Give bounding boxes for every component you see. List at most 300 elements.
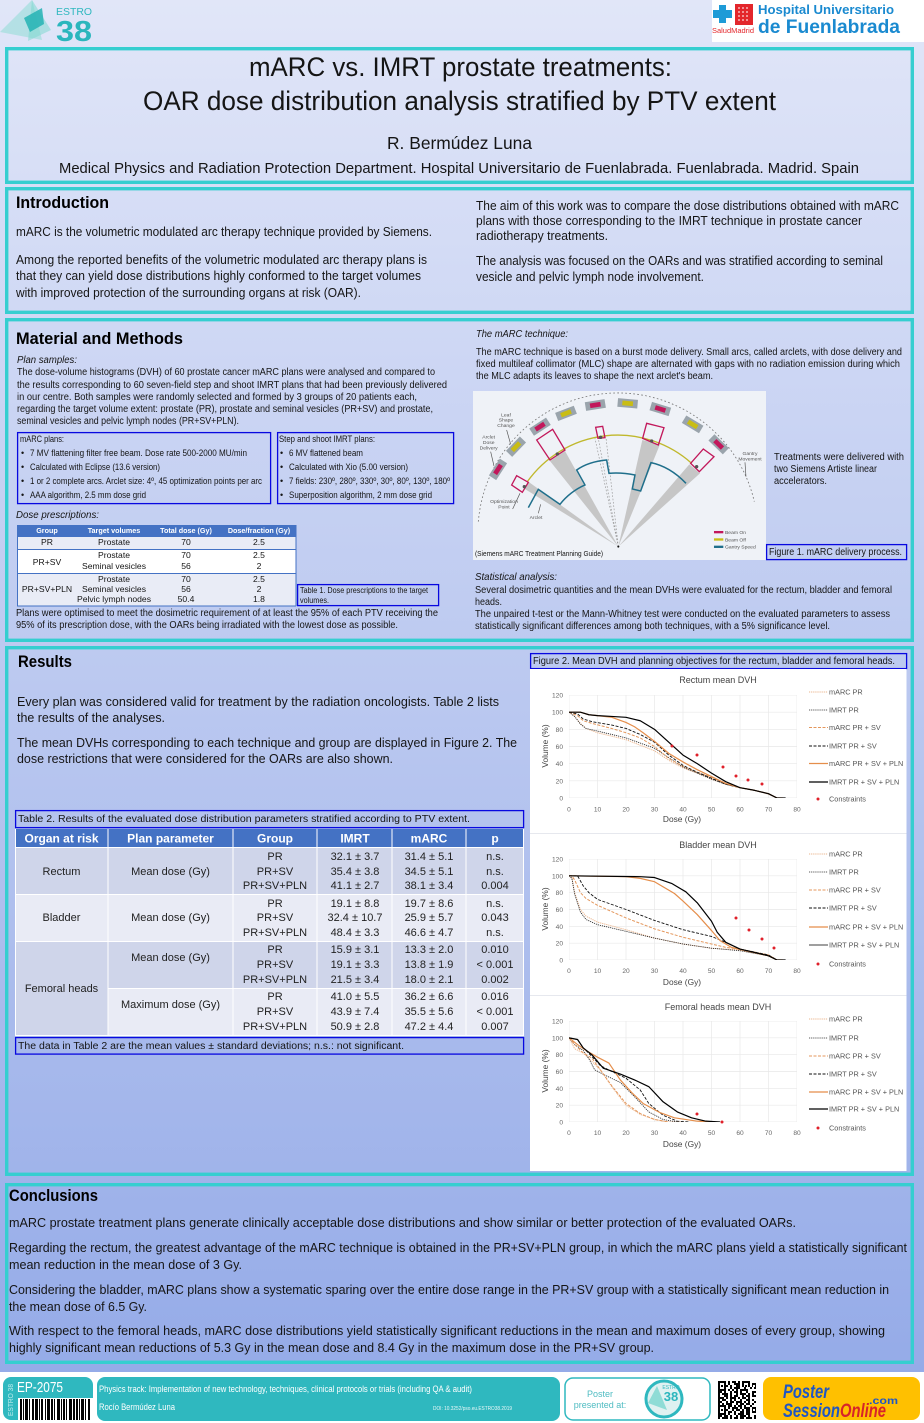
- table 2 row: femoral heads mean dose: 0.002: [481, 974, 509, 986]
- figure 2: DVH charts: [530, 669, 906, 1171]
- table 2: dose distribution results: [15, 829, 524, 1036]
- box: mARC plans: •: [21, 462, 24, 472]
- text: plan samples: [17, 355, 447, 427]
- logo: Hospital Universitario de Fuenlabrada: de Fuenlabrada: [758, 16, 900, 38]
- chart: rectum mean DVH: Dose (Gy): [663, 814, 701, 824]
- text: introduction right column: radiotherapy treatments.: [476, 228, 608, 243]
- text: the mARC technique: The mARC technique:: [476, 329, 568, 340]
- chart: bladder mean DVH: 30: [651, 968, 658, 975]
- title: OAR dose distribution analysis stratified by PTV extent: [143, 86, 777, 116]
- table 2 row: femoral heads maximum dose: 35.5 ± 5.6: [405, 1006, 453, 1018]
- chart: bladder mean DVH: 80: [556, 890, 563, 897]
- table 1: dose prescriptions: 70: [181, 550, 191, 560]
- logo: ESTRO 38: ESTRO: [56, 6, 92, 18]
- text: introduction left column: mARC is the volumetric modulated arc therapy technique provided by Siemens.: [16, 224, 432, 239]
- footer: PosterSessionOnline logo: .com: [869, 1396, 898, 1407]
- chart: rectum mean DVH: Volume (%): [540, 724, 550, 768]
- table 2 row: rectum: 32.1 ± 3.7: [331, 851, 379, 863]
- footer: poster ID and barcode: ESTRO 38: [6, 1384, 15, 1416]
- table 2 row: femoral heads mean dose: 13.8 ± 1.9: [405, 959, 453, 971]
- chart: bladder mean DVH: IMRT PR + SV: [829, 904, 877, 912]
- table 2 footnote: The data in Table 2 are the mean values ± standard deviations; n.s.: not significant.: [18, 1041, 404, 1052]
- chart: femoral heads mean DVH: mARC PR + SV + PLN: [829, 1088, 903, 1096]
- table 1: dose prescriptions: 50.4: [178, 594, 195, 604]
- chart: rectum mean DVH: mARC PR + SV + PLN: [829, 759, 903, 768]
- chart: rectum mean DVH: 100: [552, 710, 563, 717]
- table 2 row: bladder: Mean dose (Gy): [131, 912, 210, 924]
- table 2 header: mARC: [411, 832, 448, 846]
- gantry path: [478, 393, 754, 522]
- chart: rectum mean DVH: 20: [622, 806, 630, 814]
- text: linear accelerators: [774, 452, 904, 487]
- text: statistical analysis: [475, 572, 892, 632]
- gantry heads: [489, 459, 507, 480]
- text: introduction left column: [15, 224, 432, 300]
- table 1: dose prescriptions: 70: [181, 574, 191, 584]
- table 2 row: femoral heads maximum dose: [121, 991, 514, 1033]
- diagram annotations: [480, 412, 762, 521]
- table 2 row: rectum: 0.004: [481, 880, 509, 892]
- table 1: dose prescriptions: Pelvic lymph nodes: [77, 594, 151, 604]
- chart: femoral heads mean DVH: 120: [552, 1018, 563, 1026]
- table 2 row: femoral heads mean dose: PR+SV: [257, 959, 294, 971]
- box: step and shoot IMRT plans: •: [280, 448, 283, 458]
- table 2 row: bladder: 19.1 ± 8.8: [331, 898, 379, 910]
- table 2 row: femoral heads mean dose: [25, 944, 514, 995]
- text: introduction right column: vesicle and pelvic lymph node involvement.: [476, 269, 704, 284]
- panel: introduction: [7, 189, 912, 312]
- table 1: dose prescriptions: Group: [36, 526, 58, 535]
- box: mARC plans: Calculated with Eclipse (13.6 version): [30, 462, 160, 472]
- table 2 row: femoral heads maximum dose: PR+SV: [257, 1006, 294, 1018]
- table 2 row: rectum: 34.5 ± 5.1: [405, 866, 453, 878]
- chart: rectum mean DVH: 70: [765, 806, 772, 814]
- caption: table 2: Table 2. Results of the evaluated dose distribution parameters stratified according to PTV extent.: [18, 814, 470, 825]
- panel: title: [7, 49, 912, 182]
- chart: rectum mean DVH: IMRT PR + SV: [829, 742, 877, 750]
- chart: femoral heads mean DVH: Dose (Gy): [663, 1139, 701, 1149]
- text: optimisation requirement: Plans were optimised to meet the dosimetric requirement of at least the 95% of each PTV receiving the: [16, 608, 438, 619]
- table 2 row: bladder: Bladder: [43, 912, 81, 924]
- text: linear accelerators: Treatments were delivered with: [774, 452, 904, 463]
- logo: Hospital Universitario de Fuenlabrada: [712, 0, 924, 42]
- chart: femoral heads mean DVH: 50: [708, 1130, 715, 1137]
- chart: femoral heads mean DVH: mARC PR + SV: [829, 1052, 881, 1060]
- table 2 row: femoral heads mean dose: 19.1 ± 3.3: [331, 959, 379, 971]
- beam on outlines: [512, 423, 714, 492]
- chart: bladder mean DVH: 40: [556, 924, 563, 931]
- box: step and shoot IMRT plans: •: [280, 462, 283, 472]
- chart: rectum mean DVH: Constraints: [829, 794, 866, 804]
- diagram annotations: Delivery: [480, 446, 498, 452]
- panel: results: [7, 648, 912, 1174]
- box: mARC plans: 1 or 2 complete arcs. Arclet size: 4º, 45 optimization points per arc: [30, 476, 262, 486]
- table 1: dose prescriptions: PR: [41, 537, 53, 547]
- text: statistical analysis: Statistical analysis:: [475, 572, 557, 583]
- table 2 row: femoral heads maximum dose: 47.2 ± 4.4: [405, 1021, 453, 1033]
- chart: bladder mean DVH: [540, 840, 903, 987]
- table 1: dose prescriptions: 70: [181, 537, 191, 547]
- chart: bladder mean DVH: 0: [559, 958, 563, 964]
- table 1: dose prescriptions: 2: [257, 584, 262, 594]
- caption: table 1: [298, 585, 439, 606]
- text: introduction right column: The analysis was focused on the OARs and was stratified according to seminal: [476, 253, 883, 268]
- panel: conclusions: [7, 1185, 912, 1362]
- table 2 row: rectum: PR+SV: [257, 866, 294, 878]
- table 1: dose prescriptions: Prostate: [98, 537, 130, 547]
- text: conclusions: [9, 1215, 907, 1355]
- text: optimisation requirement: [16, 608, 438, 631]
- chart: femoral heads mean DVH: 80: [556, 1052, 563, 1059]
- diagram legend: [714, 530, 756, 551]
- box: step and shoot IMRT plans: Calculated with Xio (5.00 version): [289, 462, 408, 472]
- table 1: dose prescriptions: PR+SV: [33, 557, 61, 567]
- text: results summary: the results of the analyses.: [17, 710, 165, 725]
- table 2 row: femoral heads maximum dose: 43.9 ± 7.4: [331, 1006, 379, 1018]
- footer: QR code: [717, 1380, 757, 1419]
- diagram annotations: Leaf: [501, 412, 511, 418]
- text: introduction right column: plans with those corresponding to the IMRT technique in prostate cancer: [476, 213, 863, 228]
- table 1: dose prescriptions: 1.8: [253, 594, 265, 604]
- box: step and shoot IMRT plans: •: [280, 476, 283, 486]
- table 1: dose prescriptions: Prostate: [98, 574, 130, 584]
- table 2 row: rectum: Mean dose (Gy): [131, 866, 210, 878]
- affiliation: Medical Physics and Radiation Protection Department. Hospital Universitario de Fuenlabrada. Fuenlabrada. Madrid. Spain: [59, 161, 859, 177]
- diagram annotations: Shape: [499, 418, 513, 424]
- chart: rectum mean DVH: 60: [736, 806, 744, 814]
- box: step and shoot IMRT plans: Superposition algorithm, 2 mm dose grid: [289, 490, 432, 500]
- table 2 row: rectum: Rectum: [43, 866, 80, 878]
- text: the mARC technique: [476, 329, 902, 382]
- text: conclusions: mean reduction in the mean dose of 3 Gy.: [9, 1257, 242, 1272]
- footer: track and author: DOI: 10.3252/pso.eu.ESTRO38.2019: [433, 1406, 512, 1412]
- footer: PosterSessionOnline logo: Poster: [783, 1382, 830, 1403]
- table 2 header: IMRT: [340, 832, 370, 846]
- table 2 row: rectum: [43, 851, 509, 892]
- chart: femoral heads mean DVH: 40: [679, 1130, 687, 1137]
- table 2 row: bladder: PR+SV: [257, 912, 294, 924]
- diagram legend: Gantry Speed: [725, 545, 756, 551]
- chart: femoral heads mean DVH: IMRT PR + SV + PLN: [829, 1104, 899, 1114]
- footer: poster ID and barcode: [3, 1377, 93, 1421]
- table 1: dose prescriptions: 2.5: [253, 550, 265, 560]
- chart: rectum mean DVH: Rectum mean DVH: [679, 675, 757, 685]
- table 2 row: femoral heads mean dose: PR+SV+PLN: [243, 974, 307, 986]
- table 2 row: rectum: 35.4 ± 3.8: [331, 866, 379, 878]
- diagram legend: Beam Off: [725, 537, 747, 543]
- footer: poster presented at: [565, 1378, 710, 1420]
- diagram annotations: Optimization: [490, 499, 518, 505]
- text: optimisation requirement: 95% of its prescription dose, with the OARs being irradiated with the lowest dose as possible.: [16, 620, 398, 631]
- table 2 row: femoral heads mean dose: < 0.001: [476, 959, 514, 971]
- chart: femoral heads mean DVH: Volume (%): [540, 1049, 550, 1093]
- text: the mARC technique: fixed multileaf collimator (MLC) shape are alternated with gaps with no radiation emission during which: [476, 359, 900, 370]
- chart: rectum mean DVH: 80: [793, 806, 801, 814]
- box: step and shoot IMRT plans: 6 MV flattened beam: [289, 448, 363, 458]
- diagram annotations: Arclet: [482, 435, 496, 441]
- text: statistical analysis: Several dosimetric quantities and the mean DVHs were evaluated for the rectum, bladder and femoral: [475, 585, 892, 596]
- box: step and shoot IMRT plans: Step and shoot IMRT plans:: [279, 434, 375, 444]
- text: plan samples: seminal vesicles and pelvic lymph nodes (PR+SV+PLN).: [17, 416, 239, 427]
- source note: (Siemens mARC Treatment Planning Guide): [475, 549, 603, 558]
- box: step and shoot IMRT plans: •: [280, 490, 283, 500]
- chart: bladder mean DVH: 0: [567, 968, 571, 975]
- gantry speed line: [528, 460, 686, 508]
- chart: bladder mean DVH: IMRT PR: [829, 868, 859, 876]
- chart: femoral heads mean DVH: IMRT PR + SV: [829, 1070, 877, 1078]
- footer: poster presented at: Poster: [587, 1389, 613, 1399]
- table 2 row: femoral heads maximum dose: 50.9 ± 2.8: [331, 1021, 379, 1033]
- text: statistical analysis: statistically significant differences among both techniques, with a 5% significance level.: [475, 621, 830, 632]
- chart: rectum mean DVH: 120: [552, 692, 563, 700]
- chart: femoral heads mean DVH: mARC PR: [829, 1014, 863, 1024]
- caption: table 1: volumes.: [300, 596, 329, 605]
- chart: femoral heads mean DVH: 80: [793, 1130, 801, 1137]
- optimisation points: [523, 436, 698, 548]
- chart: rectum mean DVH: [540, 675, 903, 824]
- text: plan samples: The dose-volume histograms (DVH) of 60 prostate cancer mARC plans were analysed and compared to: [17, 367, 435, 378]
- table 1: dose prescriptions: Target volumes: [88, 526, 140, 535]
- box: mARC plans: •: [21, 448, 24, 458]
- heading: introduction: Introduction: [16, 194, 109, 212]
- table 2 row: bladder: 0.043: [481, 912, 509, 924]
- title: [143, 52, 777, 116]
- chart: rectum mean DVH: 20: [556, 778, 563, 785]
- chart: bladder mean DVH: mARC PR + SV + PLN: [829, 922, 903, 932]
- text: linear accelerators: two Siemens Artiste linear: [774, 464, 878, 475]
- table 1: dose prescriptions: 2: [257, 561, 262, 571]
- chart: bladder mean DVH: 40: [679, 968, 687, 975]
- chart: rectum mean DVH: mARC PR: [829, 688, 863, 696]
- chart: bladder mean DVH: mARC PR + SV: [829, 886, 881, 894]
- logo: ESTRO 38: [0, 0, 92, 48]
- text: results summary: Every plan was considered valid for treatment by the radiation oncologists. Table 2 lists: [17, 694, 499, 709]
- table 2 row: femoral heads mean dose: 13.3 ± 2.0: [405, 944, 453, 956]
- chart: bladder mean DVH: 50: [708, 968, 715, 975]
- table 2 row: bladder: [43, 898, 509, 939]
- table 1: dose prescriptions: 56: [181, 584, 191, 594]
- table 2 row: bladder: PR: [267, 898, 283, 910]
- box: mARC plans: •: [21, 490, 24, 500]
- table 2 row: femoral heads maximum dose: PR: [267, 991, 283, 1003]
- chart: bladder mean DVH: mARC PR: [829, 850, 863, 858]
- box: mARC plans: •: [21, 476, 24, 486]
- table 2 row: rectum: PR+SV+PLN: [243, 880, 307, 892]
- chart: rectum mean DVH: 0: [567, 806, 571, 814]
- table 2 row: femoral heads maximum dose: 0.007: [481, 1021, 509, 1033]
- table 2 row: bladder: 46.6 ± 4.7: [405, 927, 453, 939]
- badge: ESTRO 38: [646, 1381, 682, 1417]
- chart: bladder mean DVH: Volume (%): [540, 887, 550, 931]
- chart: bladder mean DVH: 20: [556, 941, 563, 948]
- chart: bladder mean DVH: Bladder mean DVH: [679, 840, 757, 850]
- chart: bladder mean DVH: IMRT PR + SV + PLN: [829, 940, 899, 950]
- panel: material and methods: [7, 320, 912, 640]
- box: step and shoot IMRT plans: 7 fields: 230º, 280º, 330º, 30º, 80º, 130º, 180º: [289, 476, 451, 486]
- text: plan samples: in our centre. Both samples were randomly selected and formed by 3 groups of 20 patients each,: [17, 392, 417, 403]
- caption: figure 1: [767, 545, 907, 560]
- table 2 row: rectum: 31.4 ± 5.1: [405, 851, 453, 863]
- table 2 header: [15, 829, 524, 847]
- chart: femoral heads mean DVH: 10: [594, 1130, 601, 1137]
- table 2 header: Plan parameter: [127, 832, 214, 846]
- table 2 row: femoral heads maximum dose: 0.016: [481, 991, 509, 1003]
- table 2 row: rectum: n.s.: [486, 866, 504, 878]
- diagram annotations: Gantry: [742, 451, 758, 457]
- badge: ESTRO 38: 38: [664, 1389, 678, 1404]
- footer: PosterSessionOnline logo: Online: [840, 1401, 886, 1422]
- author: R. Bermúdez Luna: [387, 133, 532, 153]
- text: results summary: [17, 694, 517, 766]
- chart: femoral heads mean DVH: 20: [622, 1130, 630, 1137]
- chart: femoral heads mean DVH: 0: [559, 1120, 563, 1126]
- figure 1: mARC delivery diagram: [473, 391, 766, 560]
- chart: femoral heads mean DVH: 20: [556, 1103, 563, 1110]
- table 2 row: femoral heads maximum dose: 41.0 ± 5.5: [331, 991, 379, 1003]
- beam off arc: [527, 435, 692, 482]
- box: mARC plans: mARC plans:: [20, 434, 64, 444]
- table 2 row: femoral heads mean dose: PR: [267, 944, 283, 956]
- table 1: dose prescriptions: Seminal vesicles: [82, 584, 146, 594]
- chart: bladder mean DVH: Constraints: [829, 960, 866, 968]
- table 2 header: p: [491, 832, 499, 846]
- table 2 row: femoral heads mean dose: 15.9 ± 3.1: [331, 944, 379, 956]
- text: plan samples: Plan samples:: [17, 355, 77, 366]
- heading: material and methods: Material and Methods: [16, 330, 183, 348]
- chart: rectum mean DVH: 30: [651, 806, 658, 814]
- text: introduction right column: [476, 198, 899, 284]
- heading: results: Results: [18, 653, 72, 671]
- table 1: dose prescriptions: Total dose (Gy): [160, 526, 212, 535]
- chart: bladder mean DVH: 70: [765, 968, 772, 975]
- logo: Hospital Universitario de Fuenlabrada: SaludMadrid: [712, 26, 754, 35]
- chart: femoral heads mean DVH: 30: [651, 1130, 658, 1137]
- text: the mARC technique: the MLC adapts its leaves to shape the next arclet's beam.: [476, 371, 713, 382]
- box: mARC plans: AAA algorithm, 2.5 mm dose grid: [30, 490, 146, 500]
- text: conclusions: highly significant mean reductions of 5.3 Gy in the mean dose and 8.4 Gy in the maximum dose in the PR+SV group.: [9, 1340, 654, 1355]
- chart: femoral heads mean DVH: 60: [556, 1069, 563, 1076]
- text: conclusions: Considering the bladder, mARC plans show a systematic sparing over the entire dose range in the PR+SV group with a statistically significant mean reduction in: [9, 1282, 889, 1297]
- caption: table 1: Table 1. Dose prescriptions to the target: [300, 586, 429, 595]
- arclet wedges: [523, 440, 700, 547]
- table 2 row: bladder: 19.7 ± 8.6: [405, 898, 453, 910]
- table 2 row: femoral heads mean dose: 21.5 ± 3.4: [331, 974, 379, 986]
- table 2 row: bladder: 25.9 ± 5.7: [405, 912, 453, 924]
- chart: bladder mean DVH: Dose (Gy): [663, 977, 701, 987]
- caption: figure 2: Figure 2. Mean DVH and planning objectives for the rectum, bladder and femoral heads.: [533, 656, 895, 667]
- table 1: dose prescriptions: Seminal vesicles: [82, 561, 146, 571]
- diagram annotations: Arclet: [530, 515, 543, 521]
- text: results summary: The mean DVHs corresponding to each technique and group are displayed in Figure 2. The: [17, 735, 517, 750]
- chart: femoral heads mean DVH: 70: [765, 1130, 772, 1137]
- text: statistical analysis: heads.: [475, 597, 502, 608]
- text: linear accelerators: accelerators.: [774, 476, 827, 487]
- chart: bladder mean DVH: 20: [622, 968, 630, 975]
- text: conclusions: mARC prostate treatment plans generate clinically acceptable dose distributions and show similar or better protection of the evaluated OARs.: [9, 1215, 796, 1230]
- chart: rectum mean DVH: 0: [559, 796, 563, 802]
- table 1: dose prescriptions: Dose/fraction (Gy): [228, 526, 291, 535]
- heading: dose prescriptions: Dose prescriptions:: [16, 510, 99, 521]
- chart: bladder mean DVH: 10: [594, 968, 601, 975]
- text: statistical analysis: The unpaired t-test or the Mann-Whitney test were conducted on the evaluated parameters to assess: [475, 609, 890, 620]
- text: conclusions: With respect to the femoral heads, mARC dose distributions yield statistically significant reductions in the mean and maximum doses of every group, showing: [9, 1323, 885, 1338]
- chart: bladder mean DVH: 60: [736, 968, 744, 975]
- caption: table 2: [16, 811, 524, 828]
- logo: Hospital Universitario de Fuenlabrada: Hospital Universitario: [758, 2, 894, 17]
- chart: femoral heads mean DVH: Femoral heads mean DVH: [665, 1002, 771, 1012]
- diagram annotations: Dose: [483, 440, 495, 446]
- table 1: dose prescriptions: 2.5: [253, 574, 265, 584]
- text: plan samples: regarding the target volume extent: prostate (PR), prostate and seminal vesicles (PR+SV) and prostate,: [17, 404, 433, 415]
- caption: figure 1: Figure 1. mARC delivery process.: [769, 547, 902, 558]
- text: introduction left column: Among the reported benefits of the volumetric modulated arc therapy plans is: [16, 252, 427, 267]
- table 1: dose prescriptions: Prostate: [98, 550, 130, 560]
- table 1: dose prescriptions: 2.5: [253, 537, 265, 547]
- chart: femoral heads mean DVH: [540, 1002, 903, 1149]
- chart: rectum mean DVH: IMRT PR: [829, 706, 859, 714]
- chart: rectum mean DVH: 80: [556, 727, 563, 734]
- chart: bladder mean DVH: 60: [556, 907, 563, 914]
- table 2 row: rectum: PR: [267, 851, 283, 863]
- table 2 row: rectum: 38.1 ± 3.4: [405, 880, 453, 892]
- chart: femoral heads mean DVH: 100: [552, 1035, 563, 1042]
- chart: rectum mean DVH: 40: [556, 761, 563, 768]
- table 2 row: bladder: n.s.: [486, 927, 504, 939]
- table 2 row: bladder: 48.4 ± 3.3: [331, 927, 379, 939]
- footer: track and author: [97, 1377, 560, 1421]
- chart: rectum mean DVH: IMRT PR + SV + PLN: [829, 778, 899, 786]
- diagram annotations: Point: [498, 504, 510, 510]
- diagram annotations: Change: [497, 423, 515, 429]
- footer: poster ID and barcode: EP-2075: [17, 1379, 63, 1396]
- table 2 row: femoral heads maximum dose: 36.2 ± 6.6: [405, 991, 453, 1003]
- table 2 row: bladder: PR+SV+PLN: [243, 927, 307, 939]
- chart: rectum mean DVH: mARC PR + SV: [829, 723, 881, 732]
- chart: bladder mean DVH: 80: [793, 968, 801, 975]
- table 1: dose prescriptions: 56: [181, 561, 191, 571]
- footer: track and author: Rocío Bermúdez Luna: [99, 1402, 175, 1412]
- chart: femoral heads mean DVH: 40: [556, 1086, 563, 1093]
- chart: femoral heads mean DVH: 0: [567, 1130, 571, 1137]
- table 2 row: bladder: 32.4 ± 10.7: [328, 912, 382, 924]
- table 2 row: femoral heads mean dose: Femoral heads: [25, 983, 99, 995]
- chart: rectum mean DVH: 40: [679, 806, 687, 814]
- footer: PosterSessionOnline logo: [763, 1377, 920, 1422]
- table 2 header: Organ at risk: [24, 832, 99, 846]
- box: step and shoot IMRT plans: [278, 433, 454, 504]
- footer: PosterSessionOnline logo: Session: [783, 1401, 840, 1422]
- table 2 row: femoral heads mean dose: 0.010: [481, 944, 509, 956]
- table 2 row: rectum: n.s.: [486, 851, 504, 863]
- table 2 header: Group: [257, 832, 293, 846]
- footer: track and author: Physics track: Implementation of new technology, techniques, clinical protocols or trials (including QA & audit): [99, 1384, 472, 1394]
- chart: femoral heads mean DVH: IMRT PR: [829, 1034, 859, 1042]
- logo: ESTRO 38: 38: [56, 16, 92, 48]
- table 2 row: bladder: n.s.: [486, 898, 504, 910]
- text: introduction left column: that they can yield dose distributions highly conformed to the target volumes: [16, 268, 421, 283]
- chart: rectum mean DVH: 50: [708, 806, 715, 814]
- text: conclusions: the mean dose of 6.5 Gy.: [9, 1299, 147, 1314]
- chart: rectum mean DVH: 60: [556, 744, 563, 751]
- chart: femoral heads mean DVH: Constraints: [829, 1124, 866, 1132]
- text: plan samples: the results corresponding to 60 seven-field step and shoot IMRT plans that had been previously delivered: [17, 380, 447, 391]
- title: mARC vs. IMRT prostate treatments:: [249, 52, 672, 82]
- box: mARC plans: 7 MV flattening filter free beam. Dose rate 500-2000 MU/min: [30, 448, 247, 458]
- table 2 row: femoral heads mean dose: Mean dose (Gy): [131, 952, 210, 964]
- badge: ESTRO 38: ESTRO: [662, 1385, 680, 1391]
- table 2 row: femoral heads maximum dose: < 0.001: [476, 1006, 514, 1018]
- text: results summary: dose restrictions that were considered for the OARs are also shown.: [17, 751, 393, 766]
